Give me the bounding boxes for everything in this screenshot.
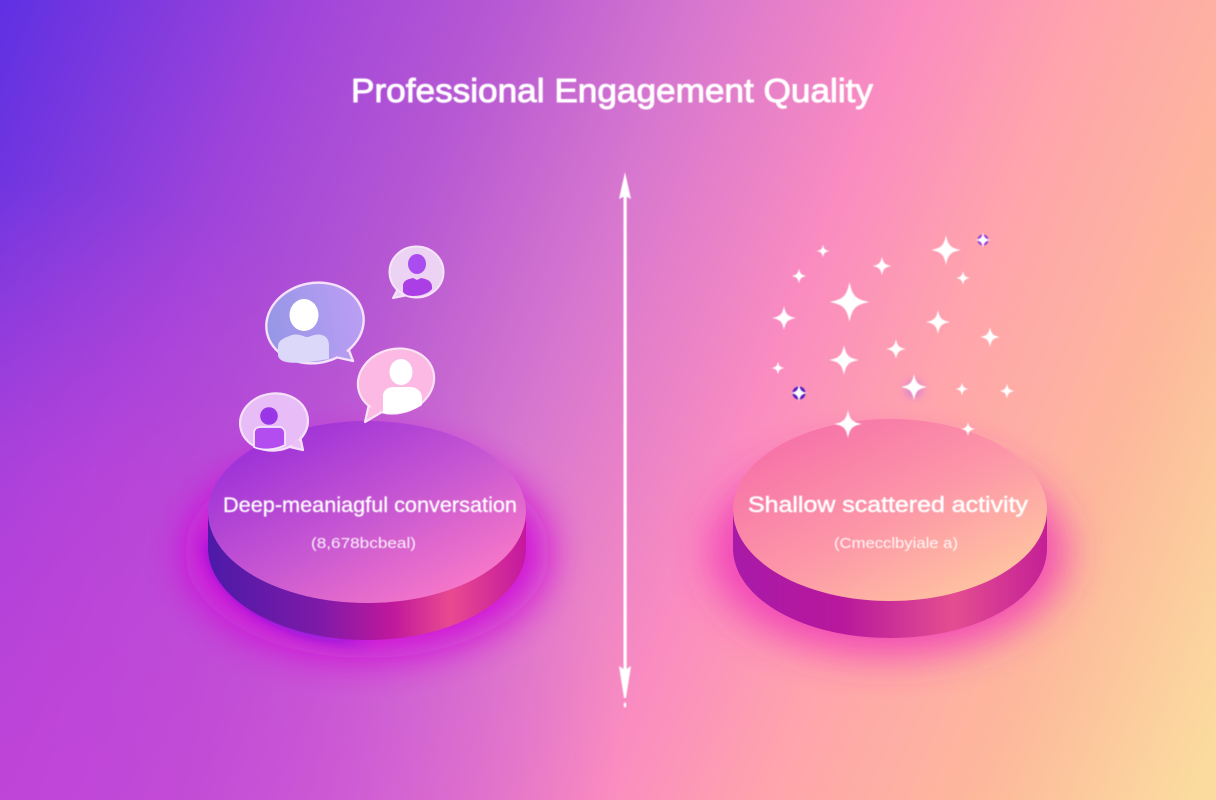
platform heading: Shallow scattered activity <box>748 492 1029 517</box>
icon: top small person speech bubble <box>390 246 444 298</box>
platform glow <box>710 448 1066 656</box>
divider double arrow <box>619 172 631 708</box>
icon: pink person speech bubble <box>351 340 441 422</box>
platform side <box>733 510 1047 638</box>
title: Professional Engagement Quality <box>351 72 874 109</box>
background lower left tint <box>0 180 620 800</box>
icon: lower left person speech bubble <box>236 389 312 455</box>
icon: scattered sparkles <box>772 232 1014 438</box>
platform sublabel: (Cmecclbyiale a) <box>834 536 958 552</box>
platform side <box>208 512 526 640</box>
platform glow <box>185 446 549 658</box>
platform top <box>208 421 526 603</box>
panel: shallow scattered activity platform <box>710 419 1066 656</box>
platform heading: Deep-meaniagful conversation <box>223 493 517 517</box>
platform top <box>733 419 1047 601</box>
panel: deep meaningful conversation platform <box>185 421 549 658</box>
icon: large person speech bubble <box>259 274 371 372</box>
platform sublabel: (8,678bcbeal) <box>311 536 416 552</box>
